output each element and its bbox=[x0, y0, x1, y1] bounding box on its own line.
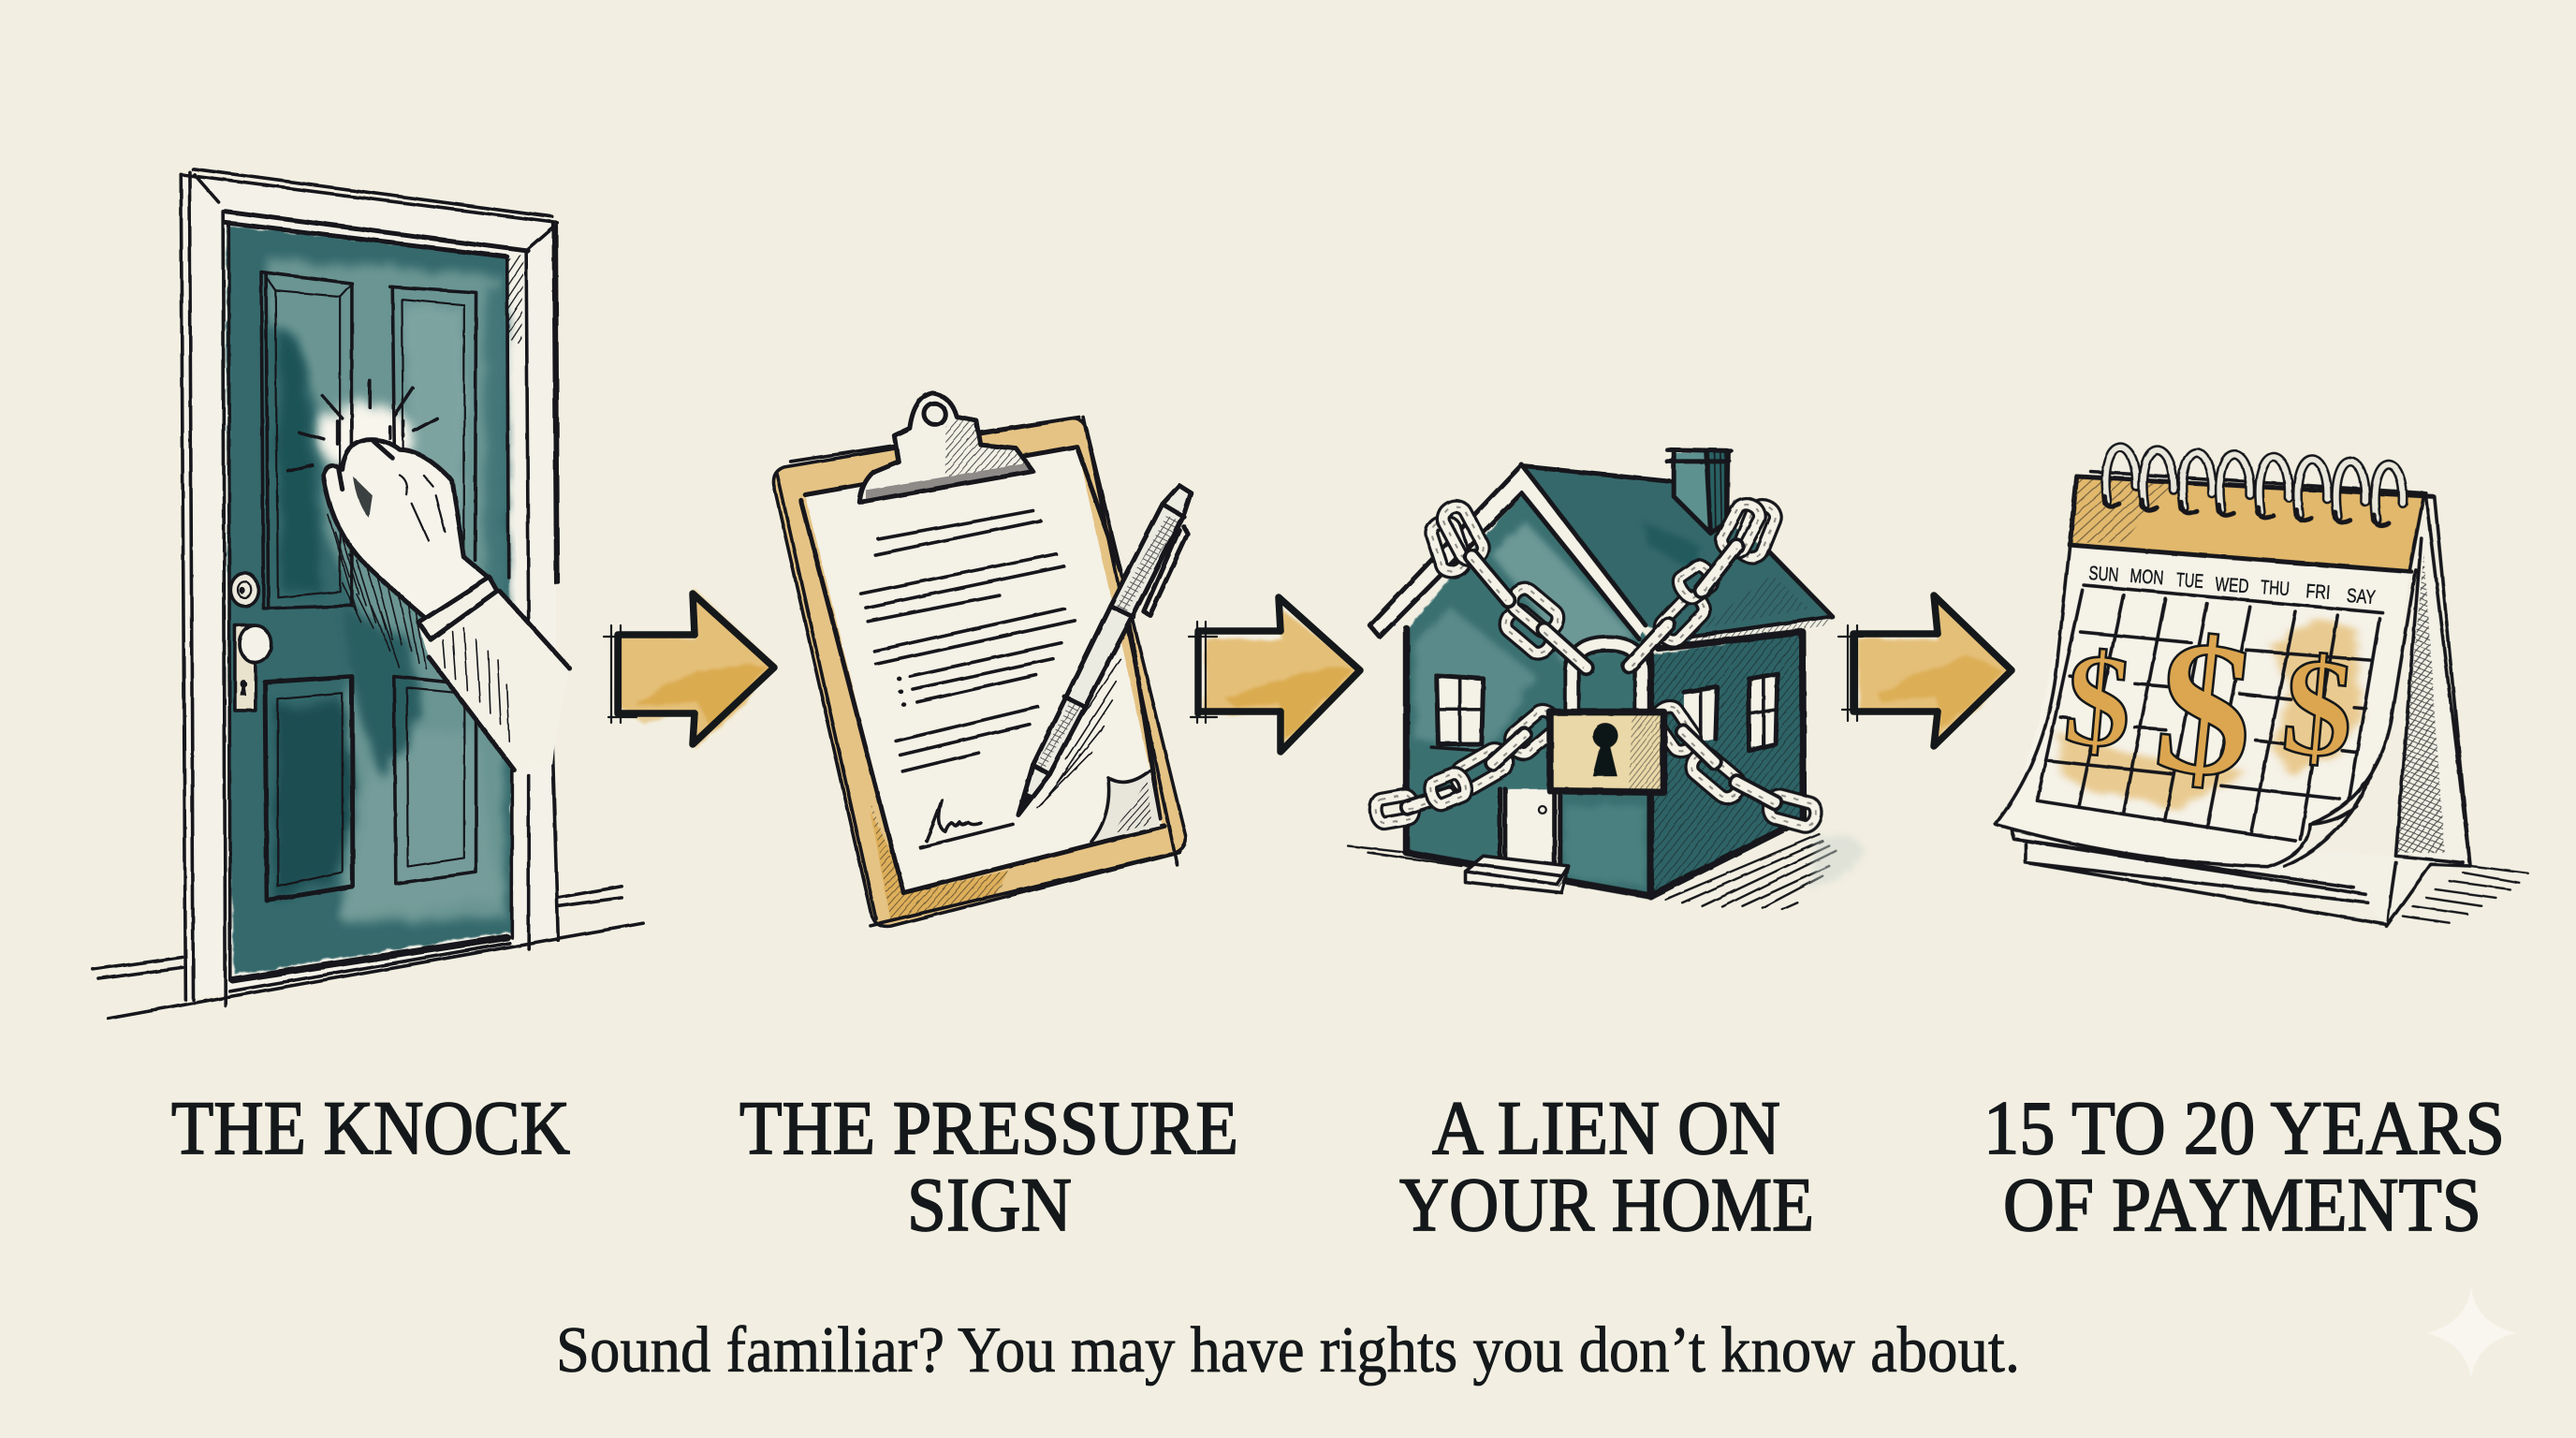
steps bbox=[1465, 856, 1569, 893]
dollar signs bbox=[2059, 596, 2360, 820]
dollar signs: $ bbox=[2276, 627, 2360, 788]
front page bbox=[1996, 545, 2416, 867]
arrow 3 bbox=[1838, 595, 2012, 749]
calendar weekday labels: WED bbox=[2215, 574, 2249, 597]
door watercolor bbox=[227, 226, 512, 975]
front wall bbox=[1406, 493, 1650, 896]
floor and baseboards bbox=[93, 887, 643, 1019]
signature bbox=[920, 800, 1013, 847]
calendar header bbox=[2070, 472, 2433, 572]
calendar washes bbox=[2058, 619, 2361, 813]
label: a lien on your home: A LIEN ON bbox=[1432, 1085, 1780, 1170]
label: the knock: THE KNOCK bbox=[171, 1085, 570, 1170]
padlock shackle bbox=[1572, 643, 1642, 715]
label: the pressure sign bbox=[739, 1085, 1238, 1247]
label: 15 to 20 years of payments: OF PAYMENTS bbox=[2003, 1162, 2481, 1247]
padlock body bbox=[1550, 712, 1663, 792]
calendar weekday labels: MON bbox=[2130, 565, 2164, 589]
calendar weekday labels: THU bbox=[2260, 577, 2291, 600]
paper bbox=[805, 447, 1163, 893]
icon: sparkle bbox=[2426, 1288, 2516, 1378]
chimney bbox=[1667, 449, 1731, 534]
knock glow bbox=[318, 404, 414, 474]
keyhole bbox=[1592, 723, 1618, 776]
chain upper left bbox=[1429, 503, 1596, 677]
label: a lien on your home bbox=[1399, 1085, 1814, 1247]
clipboard board bbox=[773, 418, 1186, 926]
closing line: Sound familiar? You may have rights you don’t know about. bbox=[556, 1314, 2020, 1387]
dollar signs: $ bbox=[2146, 596, 2264, 820]
arrow 2 bbox=[1189, 597, 1363, 752]
icon: house locked with chains bbox=[1348, 449, 1863, 909]
calendar grid bbox=[2037, 585, 2383, 841]
calendar weekday labels: SAY bbox=[2346, 585, 2377, 609]
bullets bbox=[897, 677, 907, 707]
label: a lien on your home: YOUR HOME bbox=[1399, 1162, 1814, 1247]
knock impact lines bbox=[288, 380, 437, 471]
icon: clipboard with contract and pen bbox=[773, 393, 1191, 926]
calendar weekday labels: SUN bbox=[2088, 563, 2119, 586]
label: 15 to 20 years of payments: 15 TO 20 YEARS bbox=[1983, 1085, 2505, 1170]
windows bbox=[1431, 674, 1778, 751]
label: the pressure sign: SIGN bbox=[907, 1162, 1072, 1247]
label: the pressure sign: THE PRESSURE bbox=[739, 1085, 1238, 1170]
hand bbox=[323, 440, 488, 623]
chain upper right bbox=[1620, 500, 1778, 676]
icon: desk calendar with dollar signs bbox=[1996, 448, 2528, 926]
dollar signs: $ bbox=[2059, 624, 2138, 777]
label: 15 to 20 years of payments bbox=[1983, 1085, 2505, 1247]
clipboard clip bbox=[859, 393, 1033, 502]
hatching under hand bbox=[328, 515, 434, 668]
calendar weekday labels bbox=[2088, 563, 2377, 609]
door frame bbox=[181, 174, 557, 1000]
calendar weekday labels: FRI bbox=[2305, 580, 2331, 604]
arrow 1 bbox=[604, 590, 777, 749]
spiral rings bbox=[2104, 448, 2403, 525]
door handle and keyhole plate bbox=[235, 625, 271, 711]
door frame lines bbox=[181, 169, 558, 1005]
deadbolt bbox=[230, 573, 258, 606]
sleeve and cuff bbox=[418, 578, 569, 770]
pen shadow hatch bbox=[1037, 659, 1120, 808]
ground lines and shadow bbox=[1348, 834, 1863, 909]
stacked pages bbox=[2012, 830, 2393, 926]
calendar stand and shadow bbox=[2365, 496, 2528, 926]
right wall bbox=[1650, 632, 1803, 896]
contract lines bbox=[861, 511, 1075, 771]
door panels bbox=[261, 272, 476, 901]
front door bbox=[1500, 789, 1560, 868]
icon: door with knocking hand bbox=[93, 169, 643, 1019]
pen bbox=[1018, 486, 1191, 815]
chain lower right bbox=[1652, 702, 1819, 829]
page curl bbox=[1091, 770, 1161, 842]
roof bbox=[1525, 466, 1833, 645]
calendar weekday labels: TUE bbox=[2175, 569, 2204, 593]
chain lower left bbox=[1374, 707, 1560, 824]
gable trim bbox=[1369, 464, 1646, 638]
